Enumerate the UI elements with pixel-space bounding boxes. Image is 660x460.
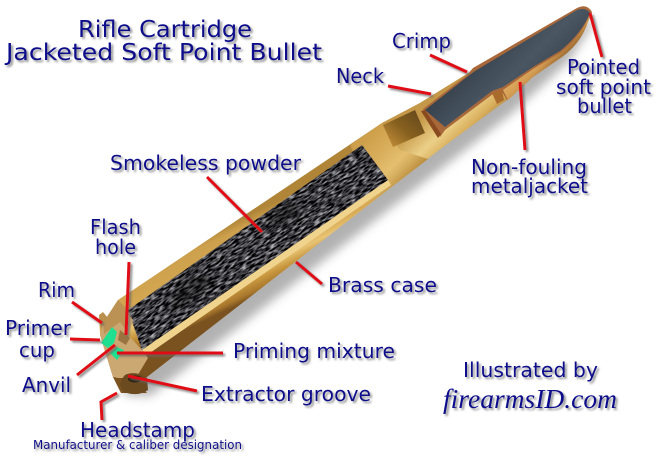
label: crimp: Crimp (392, 29, 451, 53)
flash hole (118, 330, 130, 345)
label: non-fouling metal jacket: metaljacket (471, 174, 588, 198)
powder light inner wall (142, 180, 391, 355)
label: primer cup: Primer (5, 316, 72, 340)
rim (99, 312, 108, 330)
label: crimp (392, 29, 467, 72)
label: pointed soft point bullet: soft point (556, 75, 651, 99)
extractor groove (120, 373, 148, 394)
title (4, 17, 322, 66)
credit: firearmsID.com: firearmsID.com (443, 384, 617, 414)
label: priming mixture: Priming mixture (233, 339, 395, 363)
label: anvil: Anvil (22, 373, 71, 397)
bullet lead core (425, 9, 590, 127)
label: headstamp: Manufacturer & caliber designation (33, 438, 242, 452)
case mouth cut (421, 110, 441, 138)
label: non-fouling metal jacket (471, 82, 588, 198)
label: extractor groove (128, 376, 371, 406)
label: brass case: Brass case (328, 273, 437, 297)
label: primer cup (5, 316, 100, 362)
title: Jacketed Soft Point Bullet (4, 40, 322, 66)
brass case body (99, 70, 507, 393)
shoulder highlight band (352, 123, 428, 202)
rifle cartridge cutaway illustration (88, 6, 596, 396)
label: neck (336, 64, 431, 94)
label: anvil (22, 345, 115, 397)
label: pointed soft point bullet: Pointed (567, 55, 640, 79)
label: flash hole: hole (95, 235, 136, 259)
bullet jacket (423, 6, 592, 137)
label: pointed soft point bullet: bullet (577, 94, 632, 118)
label: primer cup: cup (19, 338, 55, 362)
label: rim (38, 278, 102, 323)
title: Rifle Cartridge (78, 17, 252, 43)
label: rim: Rim (38, 278, 75, 302)
label: non-fouling metal jacket: Non-fouling (471, 155, 587, 179)
inner shoulder cut (383, 110, 425, 147)
label: headstamp (33, 393, 242, 452)
primer compound (101, 327, 117, 348)
label: smokeless powder: Smokeless powder (110, 151, 302, 175)
label: extractor groove: Extractor groove (201, 382, 371, 406)
label: flash hole: Flash (90, 215, 141, 239)
label: pointed soft point bullet (556, 13, 651, 118)
label: neck: Neck (336, 64, 384, 88)
head shade (103, 300, 128, 334)
label: smokeless powder (110, 151, 302, 232)
credit: illustrated by: Illustrated by (463, 358, 598, 382)
head section (100, 300, 148, 378)
label: headstamp: Headstamp (80, 418, 195, 442)
label: brass case (296, 262, 437, 297)
smokeless powder fill (128, 145, 388, 350)
cannelure notch (492, 90, 504, 104)
label: flash hole (90, 215, 141, 335)
case body front of shoulder (350, 70, 507, 202)
priming compound lower (110, 347, 124, 360)
